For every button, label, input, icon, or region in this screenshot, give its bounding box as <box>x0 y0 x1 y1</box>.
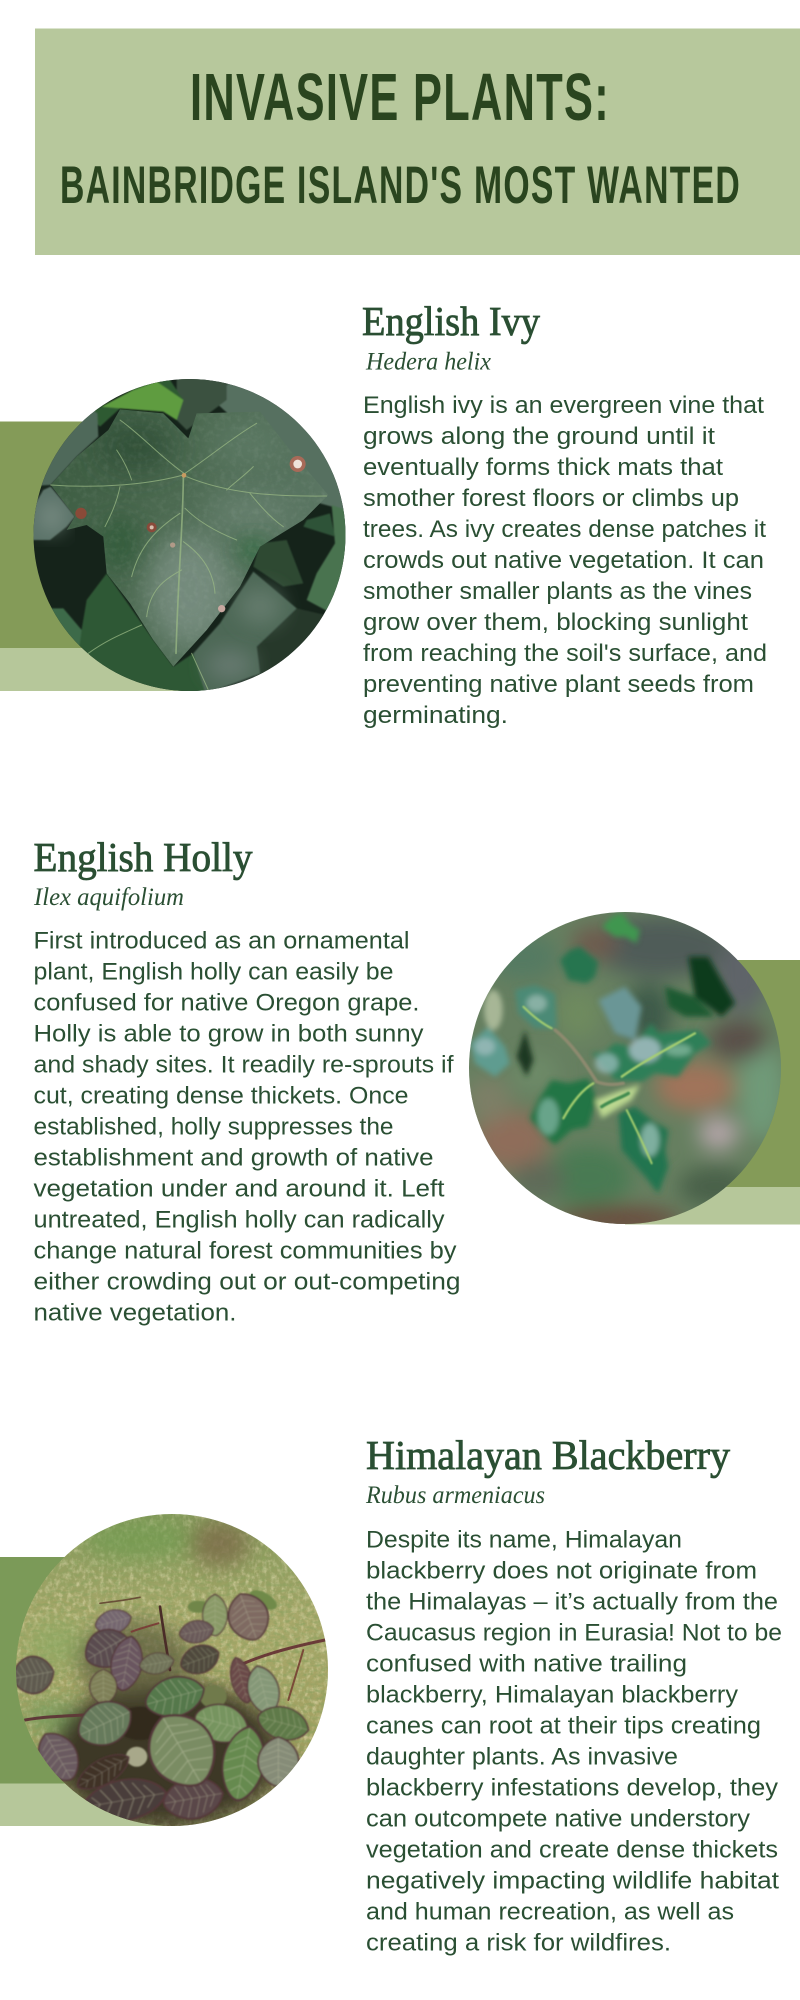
text block: English Holly description: cut, creating dense thickets. Once <box>34 1082 408 1110</box>
text block: Himalayan Blackberry description: canes can root at their tips creating <box>366 1712 761 1740</box>
main ivy leaf <box>51 409 328 667</box>
photo: ivy leaf <box>34 379 346 691</box>
text block: Himalayan Blackberry description: the Himalayas – it’s actually from the <box>366 1588 778 1616</box>
text block: English Holly description: confused for native Oregon grape. <box>34 990 420 1016</box>
text block: English Ivy description: preventing native plant seeds from <box>363 671 754 698</box>
text block: English Ivy description: from reaching the soil's surface, and <box>363 640 767 667</box>
text block: English Holly description: and shady sites. It readily re-sprouts if <box>34 1052 454 1078</box>
bramble leaves <box>10 1586 313 1827</box>
bramble stems <box>25 1597 325 1720</box>
text block: English Holly description: vegetation under and around it. Left <box>34 1176 445 1202</box>
photo: blackberry brambles <box>16 1514 328 1826</box>
text block: English Ivy description: trees. As ivy creates dense patches it <box>363 516 766 543</box>
panel: English Holly <box>33 834 800 1240</box>
text block: English Ivy description <box>363 392 767 729</box>
text block: Himalayan Blackberry description: blackberry, Himalayan blackberry <box>366 1682 738 1708</box>
text block: English Ivy description: eventually forms thick mats that <box>363 454 723 481</box>
text block: English Holly description: change natural forest communities by <box>34 1238 456 1264</box>
text block: Himalayan Blackberry description: blackberry infestations develop, they <box>366 1774 778 1802</box>
panel: Himalayan Blackberry <box>0 1432 730 1840</box>
text block: English Ivy description: germinating. <box>363 702 508 729</box>
text block: Himalayan Blackberry description <box>366 1526 782 1956</box>
text block: Himalayan Blackberry description: negatively impacting wildlife habitat <box>366 1868 779 1894</box>
text block: English Holly description <box>34 928 460 1326</box>
text block: English Holly description: untreated, English holly can radically <box>34 1206 444 1234</box>
text block: English Ivy description: grows along the ground until it <box>363 423 715 450</box>
text block: Himalayan Blackberry description: daughter plants. As invasive <box>366 1744 678 1770</box>
text block: English Ivy description: smother smaller plants as the vines <box>363 578 752 605</box>
text block: English Holly description: First introduced as an ornamental <box>34 928 410 954</box>
text block: Himalayan Blackberry description: Despite its name, Himalayan <box>366 1526 682 1554</box>
holly stem and midribs <box>523 1007 695 1163</box>
heading: Himalayan Blackberry: Himalayan Blackberry <box>366 1432 730 1478</box>
heading: English Ivy: English Ivy <box>362 298 540 344</box>
text block: English Holly description: establishment and growth of native <box>34 1144 433 1172</box>
text block: English Holly description: either crowding out or out-competing <box>34 1268 460 1296</box>
text block: English Holly description: plant, English holly can easily be <box>34 958 394 986</box>
scientific name: Hedera helix: Hedera helix <box>365 348 491 376</box>
text block: English Ivy description: English ivy is an evergreen vine that <box>363 392 764 419</box>
text block: English Holly description: native vegetation. <box>34 1300 237 1326</box>
blackberry colour bands <box>0 1557 175 1826</box>
text block: English Ivy description: smother forest floors or climbs up <box>363 485 739 512</box>
text block: English Holly description: established, holly suppresses the <box>34 1114 394 1140</box>
text block: English Ivy description: grow over them, blocking sunlight <box>363 609 748 636</box>
text block: Himalayan Blackberry description: and human recreation, as well as <box>366 1898 734 1926</box>
ivy veins <box>51 420 327 690</box>
text block: Himalayan Blackberry description: Caucasus region in Eurasia! Not to be <box>366 1620 782 1646</box>
text block: English Ivy description: crowds out native vegetation. It can <box>363 547 764 574</box>
ivy leaf spots <box>75 508 87 519</box>
text block: English Holly description: Holly is able to grow in both sunny <box>34 1020 424 1048</box>
scientific name: Rubus armeniacus: Rubus armeniacus <box>365 1482 545 1509</box>
ivy colour bands <box>0 422 190 691</box>
text block: Himalayan Blackberry description: vegetation and create dense thickets <box>366 1836 778 1864</box>
text block: Himalayan Blackberry description: can outcompete native understory <box>366 1806 750 1832</box>
text block: Himalayan Blackberry description: confused with native trailing <box>366 1650 687 1678</box>
scientific name: Ilex aquifolium: Ilex aquifolium <box>33 884 184 911</box>
title banner <box>35 28 800 255</box>
heading: English Holly: English Holly <box>34 834 253 880</box>
holly colour bands <box>625 960 800 1224</box>
text block: Himalayan Blackberry description: creating a risk for wildfires. <box>366 1930 671 1956</box>
panel: English Ivy <box>0 298 540 710</box>
text block: Himalayan Blackberry description: blackberry does not originate from <box>366 1558 757 1584</box>
photo: holly sprig <box>469 912 781 1224</box>
